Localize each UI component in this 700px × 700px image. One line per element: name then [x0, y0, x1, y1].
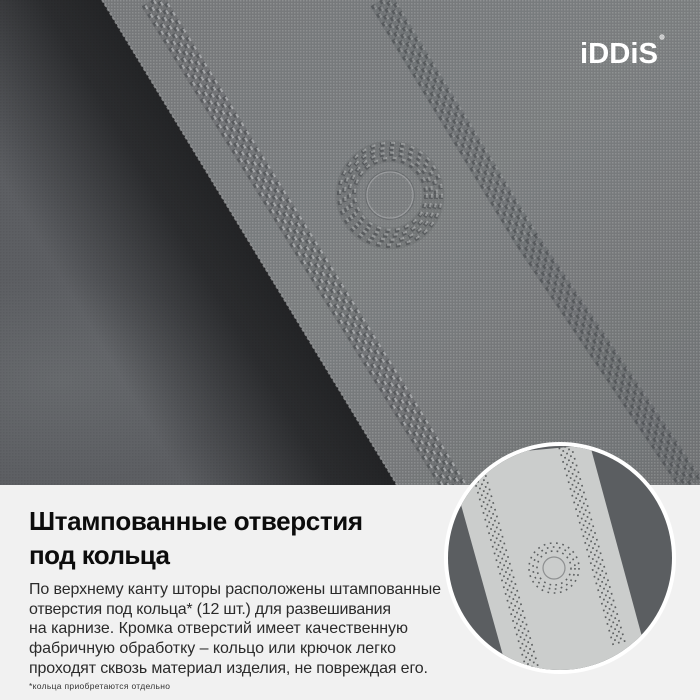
photo: light grey fabric strip — [102, 0, 700, 490]
inset: right perforation band — [559, 444, 625, 645]
body text: проходят сквозь материал изделия, не повреждая его. — [29, 660, 428, 677]
stamped perforation band right, upper part — [372, 0, 537, 246]
heading: под кольца — [29, 540, 171, 570]
inset: dark background — [448, 446, 672, 670]
footnote: *кольца приобретаются отдельно — [29, 681, 170, 691]
inset circle: close-up of the ring hole — [444, 442, 676, 674]
body text: отверстия под кольца* (12 шт.) для развешивания — [29, 601, 391, 618]
body text: фабричную обработку – кольцо или крючок легко — [29, 640, 396, 657]
inset: ring hole — [529, 543, 579, 593]
stamped perforation band right, lower part — [519, 234, 700, 491]
text panel background — [0, 485, 700, 700]
stamped ring hole — [339, 143, 442, 246]
stamped perforation band left — [144, 0, 465, 495]
inset: light fabric strip — [461, 446, 642, 670]
body text: По верхнему канту шторы расположены штампованные — [29, 581, 441, 598]
inset: left perforation band — [472, 468, 538, 669]
heading: Штампованные отверстия — [29, 506, 363, 536]
photo: dark curtain fabric background — [0, 0, 420, 490]
logo: iDDiS: iDDiS — [580, 38, 658, 70]
body text: на карнизе. Кромка отверстий имеет качественную — [29, 620, 408, 637]
